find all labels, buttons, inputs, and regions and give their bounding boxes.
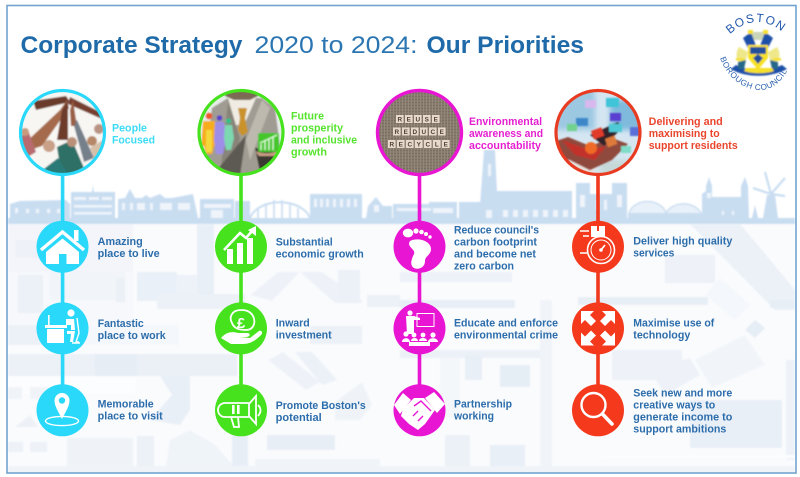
icon: hand holding pound [215,302,267,354]
icon: house [36,221,88,273]
photo: reuse reduce recycle tiles on burlap: E [440,129,445,136]
text: Promote Boston's potential: potential [276,412,322,424]
text: Memorable place to visit [98,398,163,422]
photo: businessman with figures and chart [198,90,284,176]
text: Maximise use of technology [633,317,715,341]
text: Inward investment [276,317,332,341]
text: Partnership working [453,398,513,422]
title: Corporate Strategy [20,32,243,59]
text: Partnership working: Partnership [454,398,513,410]
text: Reduce council's carbon footprint and become net zero carbon: carbon footprint [454,236,537,248]
panel: Environmental awareness and accountability [378,90,558,436]
heading: Future prosperity and inclusive growth: Future [291,111,324,123]
photo: reuse reduce recycle tiles on burlap: E [399,142,404,148]
logo: Boston Borough Council crest: BOROUGH COUNCIL [720,56,787,90]
photo: reuse reduce recycle tiles on burlap: E [444,142,449,148]
photo: reuse reduce recycle tiles on burlap: Y [417,142,422,148]
heading: Future prosperity and inclusive growth: growth [291,147,327,159]
text: Substantial economic growth: economic growth [276,248,364,260]
text: Amazing place to live: Amazing [98,236,143,248]
photo: reuse reduce recycle tiles on burlap: C [425,142,430,148]
connector line: cyan column [61,172,64,387]
icon: footprint [394,221,446,273]
photo: hands raised together [20,90,106,180]
logo: Boston Borough Council crest [720,14,788,90]
photo: reuse reduce recycle tiles on burlap: S [425,116,430,124]
heading: Environmental awareness and accountability: awareness and [469,128,543,140]
heading: Environmental awareness and accountability: accountability [469,140,541,152]
connector line: magenta column [418,172,421,387]
heading: Delivering and maximising to support residents: Delivering and [649,116,723,128]
text: Deliver high quality services: services [633,247,674,259]
text: Maximise use of technology: Maximise use of [633,317,715,329]
photo: reuse reduce recycle tiles on burlap: R [389,142,394,148]
text: Partnership working: working [453,410,494,422]
title: our priorities: Our Priorities [426,32,584,59]
text: Amazing place to live [98,236,160,260]
text: Reduce council's carbon footprint and become net zero carbon: and become net [454,248,536,260]
text: Inward investment: investment [276,329,332,341]
heading: Future prosperity and inclusive growth: and inclusive [291,135,357,147]
logo: Boston Borough Council crest: BOSTON [726,14,786,34]
icon: four expanding arrows [572,302,624,354]
icon: teacher and audience [394,302,446,354]
text: Promote Boston's potential [276,400,366,424]
photo: hand holding phone with app icons [555,90,642,178]
photo: reuse reduce recycle tiles on burlap: E [407,116,412,124]
photo: reuse reduce recycle tiles on burlap: R [397,116,402,124]
text: Reduce council's carbon footprint and become net zero carbon: zero carbon [454,260,514,272]
heading: Future prosperity and inclusive growth: prosperity [291,123,343,135]
text: Substantial economic growth [276,236,364,260]
text: Seek new and more creative ways to generate income to support ambitions: support ambitions [633,423,726,435]
photo: reuse reduce recycle tiles on burlap: C [407,142,412,148]
icon: stopwatch delivery [572,221,624,273]
background: street map pattern [8,224,795,473]
panel: People Focused [20,90,166,436]
icon: megaphone [215,384,267,436]
panel: Delivering and maximising to support residents [555,90,738,436]
heading: People Focused: People [112,123,147,135]
photo: reuse reduce recycle tiles on burlap: E [434,116,439,124]
icon: map pin [36,384,88,436]
heading: Delivering and maximising to support residents: maximising to [649,128,720,140]
heading: Environmental awareness and accountability [469,116,543,152]
text: Promote Boston's potential: Promote Boston's [276,400,366,412]
text: Educate and enforce environmental crime: environmental crime [454,329,558,341]
icon: hand holding pound: £ [237,315,246,332]
heading: Delivering and maximising to support residents: support residents [649,140,738,152]
text: Fantastic place to work [98,318,166,342]
icon: magnifying glass [572,384,624,436]
text: Deliver high quality services [633,235,732,259]
text: Reduce council's carbon footprint and become net zero carbon: Reduce council's [454,224,539,236]
photo: reuse reduce recycle tiles on burlap: C [430,129,435,136]
photo: reuse reduce recycle tiles on burlap: D [412,129,417,136]
text: Maximise use of technology: technology [633,329,690,341]
icon: person at desk [36,302,88,354]
skyline of Boston [8,150,795,224]
text: Seek new and more creative ways to generate income to support ambitions: generate income to [633,411,733,423]
text: Inward investment: Inward [276,317,310,329]
text: Memorable place to visit: place to visit [98,410,163,422]
text: Seek new and more creative ways to generate income to support ambitions [633,387,733,435]
photo: reuse reduce recycle tiles on burlap: U [415,116,420,124]
photo: reuse reduce recycle tiles on burlap: U [421,129,426,136]
text: Amazing place to live: place to live [98,248,160,260]
photo: reuse reduce recycle tiles on burlap: L [435,142,439,148]
icon: growth chart [215,221,267,273]
text: Fantastic place to work: place to work [98,330,166,342]
heading: Future prosperity and inclusive growth [291,111,357,159]
connector line: green column [239,172,243,387]
text: Substantial economic growth: Substantial [276,236,333,248]
text: Educate and enforce environmental crime: Educate and enforce [454,317,558,329]
photo: reuse reduce recycle tiles on burlap: E [404,129,409,136]
connector line: red column [596,172,600,387]
text: Educate and enforce environmental crime [454,317,558,341]
text: Seek new and more creative ways to generate income to support ambitions: creative ways to [633,399,716,411]
text: Memorable place to visit: Memorable [98,398,154,410]
title: years: 2020 to 2024: [254,32,418,59]
icon: handshake [394,384,446,436]
text: Seek new and more creative ways to generate income to support ambitions: Seek new and more [633,387,732,399]
panel: Future prosperity and inclusive growth [198,90,366,436]
heading: People Focused [112,123,155,147]
heading: Environmental awareness and accountability: Environmental [469,116,542,128]
text: Deliver high quality services: Deliver high quality [633,235,732,247]
heading: Delivering and maximising to support residents [649,116,738,152]
photo: reuse reduce recycle tiles on burlap: R [394,129,399,136]
photo: reuse reduce recycle tiles on burlap [378,90,462,174]
text: Fantastic place to work: Fantastic [98,318,144,330]
text: Reduce council's carbon footprint and become net zero carbon [454,224,539,272]
heading: People Focused: Focused [112,135,155,147]
